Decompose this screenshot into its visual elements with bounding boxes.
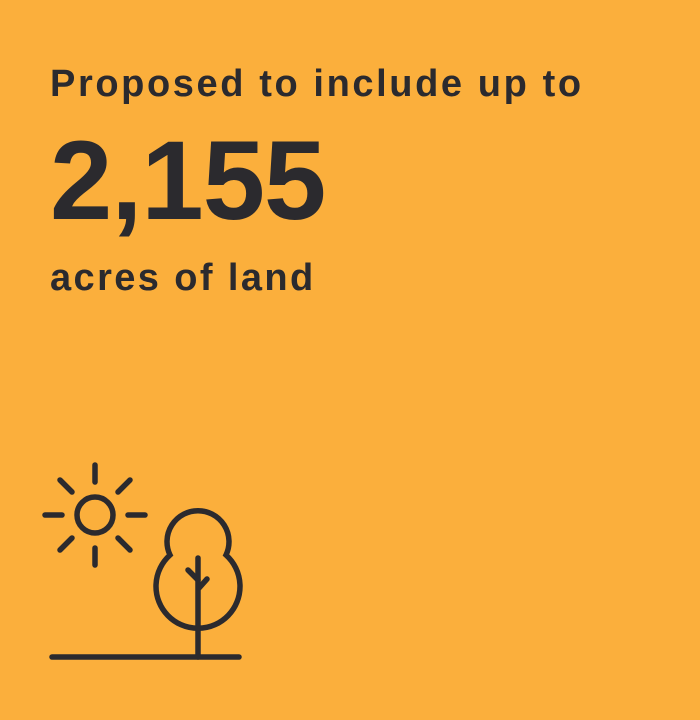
text: acres of land: acres of land <box>50 257 316 299</box>
ground line <box>52 654 239 660</box>
big number: 2,155 <box>50 118 325 243</box>
icon: sun <box>45 465 145 565</box>
icon: tree <box>156 511 240 657</box>
heading: intro line: Proposed to include up to <box>50 63 584 105</box>
